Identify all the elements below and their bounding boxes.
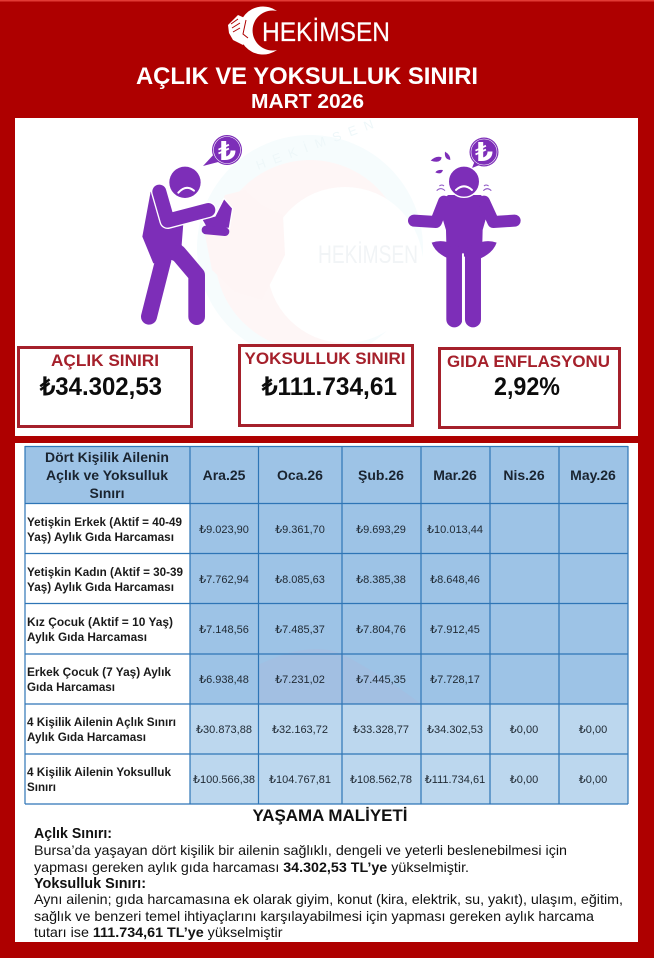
header row: Açlık ve Yoksulluk — [46, 467, 168, 483]
row: açlık sınırı: ₺0,00 — [579, 724, 607, 736]
row: açlık sınırı: Aylık Gıda Harcaması — [27, 730, 146, 744]
row: açlık sınırı: ₺0,00 — [510, 724, 538, 736]
header row: Şub.26 — [358, 467, 404, 483]
row: yetişkin erkek: Yaş) Aylık Gıda Harcaması — [27, 530, 174, 544]
text block: yoksulluk sınırı: sağlık ve benzeri temel ihtiyaçlarını karşılayabilmesi için yapması gereken aylık harcama — [34, 908, 594, 924]
header row: Mar.26 — [433, 467, 477, 483]
watermark: HEKİMSEN — [318, 240, 418, 269]
row: erkek çocuk: ₺7.231,02 — [275, 674, 325, 686]
row: yoksulluk sınırı: ₺0,00 — [579, 774, 607, 786]
row: yoksulluk sınırı: ₺100.566,38 — [193, 774, 255, 786]
row: erkek çocuk: ₺6.938,48 — [199, 674, 249, 686]
row: yetişkin kadın — [27, 565, 480, 594]
watermark — [197, 114, 423, 361]
table: monthly figures — [25, 446, 628, 804]
stat box: açlık sınırı: AÇLIK SINIRI — [51, 352, 159, 370]
row: yetişkin erkek: ₺9.693,29 — [356, 524, 406, 536]
row: açlık sınırı: 4 Kişilik Ailenin Açlık Sınırı — [27, 715, 176, 729]
row: yoksulluk sınırı: ₺0,00 — [510, 774, 538, 786]
speech bubble with lira sign — [470, 138, 498, 168]
text block: yoksulluk sınırı: Aynı ailenin; gıda harcamasına ek olarak giyim, konut (kira, elektrik, su, yakıt), ulaşım, eğitim, — [34, 891, 623, 907]
row: yoksulluk sınırı: ₺111.734,61 — [425, 774, 485, 786]
row: yetişkin kadın: ₺8.385,38 — [356, 574, 406, 586]
header row: May.26 — [570, 467, 616, 483]
row: açlık sınırı — [27, 715, 607, 744]
row: yoksulluk sınırı: ₺104.767,81 — [269, 774, 331, 786]
text block: yoksulluk sınırı: Yoksulluk Sınırı: — [34, 876, 146, 892]
row: yoksulluk sınırı: Sınırı — [27, 780, 56, 794]
row: erkek çocuk: Erkek Çocuk (7 Yaş) Aylık — [27, 665, 171, 679]
row: kız çocuk: ₺7.485,37 — [275, 624, 325, 636]
stat box: gıda enflasyonu: 2,92% — [494, 373, 560, 401]
speech bubble with lira sign — [203, 135, 242, 167]
header row: Oca.26 — [277, 467, 323, 483]
watermark: HEKİMSEN — [254, 114, 383, 173]
row: yetişkin kadın: Yetişkin Kadın (Aktif = 30-39 — [27, 565, 183, 579]
row: kız çocuk: Aylık Gıda Harcaması — [27, 630, 147, 644]
icon: man with empty pockets — [414, 138, 515, 328]
stat box: açlık sınırı — [18, 348, 192, 426]
row: açlık sınırı: ₺33.328,77 — [353, 724, 409, 736]
stat box: açlık sınırı: ₺34.302,53 — [39, 373, 162, 401]
stat box: yoksulluk sınırı — [240, 346, 412, 426]
icon: man searching his wallet — [142, 135, 242, 317]
row: yetişkin erkek: ₺9.023,90 — [199, 524, 249, 536]
panel: table and text — [15, 443, 638, 942]
row: kız çocuk: Kız Çocuk (Aktif = 10 Yaş) — [27, 615, 173, 629]
row: yoksulluk sınırı — [27, 765, 607, 794]
header row — [45, 449, 616, 501]
row: yetişkin kadın: ₺7.762,94 — [199, 574, 249, 586]
logo: Hekimsen: HEKİMSEN — [262, 16, 390, 47]
row: yetişkin kadın: ₺8.648,46 — [430, 574, 480, 586]
text block: açlık sınırı — [34, 826, 567, 875]
stat box: gıda enflasyonu: GIDA ENFLASYONU — [447, 353, 610, 371]
row: yetişkin erkek: ₺10.013,44 — [427, 524, 483, 536]
row: yetişkin kadın: ₺8.085,63 — [275, 574, 325, 586]
row: açlık sınırı: ₺34.302,53 — [427, 724, 483, 736]
header row: Nis.26 — [503, 467, 545, 483]
text block: açlık sınırı: Açlık Sınırı: — [34, 826, 112, 842]
row: yetişkin erkek — [27, 515, 483, 544]
row: yoksulluk sınırı: 4 Kişilik Ailenin Yoksulluk — [27, 765, 171, 779]
text block: açlık sınırı: yapması gereken aylık gıda harcaması 34.302,53 TL’ye yükselmiştir. — [34, 859, 469, 875]
text block: yoksulluk sınırı — [34, 876, 623, 940]
row: açlık sınırı: ₺32.163,72 — [272, 724, 328, 736]
row: erkek çocuk — [27, 665, 480, 694]
row: yetişkin erkek: Yetişkin Erkek (Aktif = 40-49 — [27, 515, 182, 529]
row: erkek çocuk: ₺7.445,35 — [356, 674, 406, 686]
stat box: yoksulluk sınırı: ₺111.734,61 — [261, 373, 397, 401]
row: kız çocuk: ₺7.148,56 — [199, 624, 249, 636]
stat box: yoksulluk sınırı: YOKSULLUK SINIRI — [244, 350, 406, 368]
text block: açlık sınırı: Bursa’da yaşayan dört kişilik bir ailenin sağlıklı, dengeli ve yeterli beslenebilmesi için — [34, 842, 567, 858]
row: kız çocuk: ₺7.912,45 — [430, 624, 480, 636]
row: kız çocuk: ₺7.804,76 — [356, 624, 406, 636]
row: yetişkin kadın: Yaş) Aylık Gıda Harcaması — [27, 580, 174, 594]
row: erkek çocuk: Gıda Harcaması — [27, 680, 115, 694]
row: açlık sınırı: ₺30.873,88 — [196, 724, 252, 736]
header row: Sınırı — [89, 485, 125, 501]
speech bubble with lira sign: ₺ — [218, 137, 236, 167]
panel: illustrations and key figures — [15, 118, 638, 436]
logo: Hekimsen — [228, 7, 390, 55]
row: kız çocuk — [27, 615, 480, 644]
text block: yoksulluk sınırı: tutarı ise 111.734,61 TL’ye yükselmiştir — [34, 924, 283, 940]
row: yetişkin erkek: ₺9.361,70 — [275, 524, 325, 536]
stat box: gıda enflasyonu — [440, 348, 620, 428]
row: yoksulluk sınırı: ₺108.562,78 — [350, 774, 412, 786]
title: AÇLIK VE YOKSULLUK SINIRI — [136, 63, 478, 90]
header row: Ara.25 — [203, 467, 246, 483]
heading: yaşama maliyeti: YAŞAMA MALİYETİ — [252, 807, 408, 825]
subtitle: date: MART 2026 — [251, 90, 364, 113]
speech bubble with lira sign: ₺ — [475, 138, 493, 168]
row: erkek çocuk: ₺7.728,17 — [430, 674, 480, 686]
header row: Dört Kişilik Ailenin — [45, 449, 169, 465]
